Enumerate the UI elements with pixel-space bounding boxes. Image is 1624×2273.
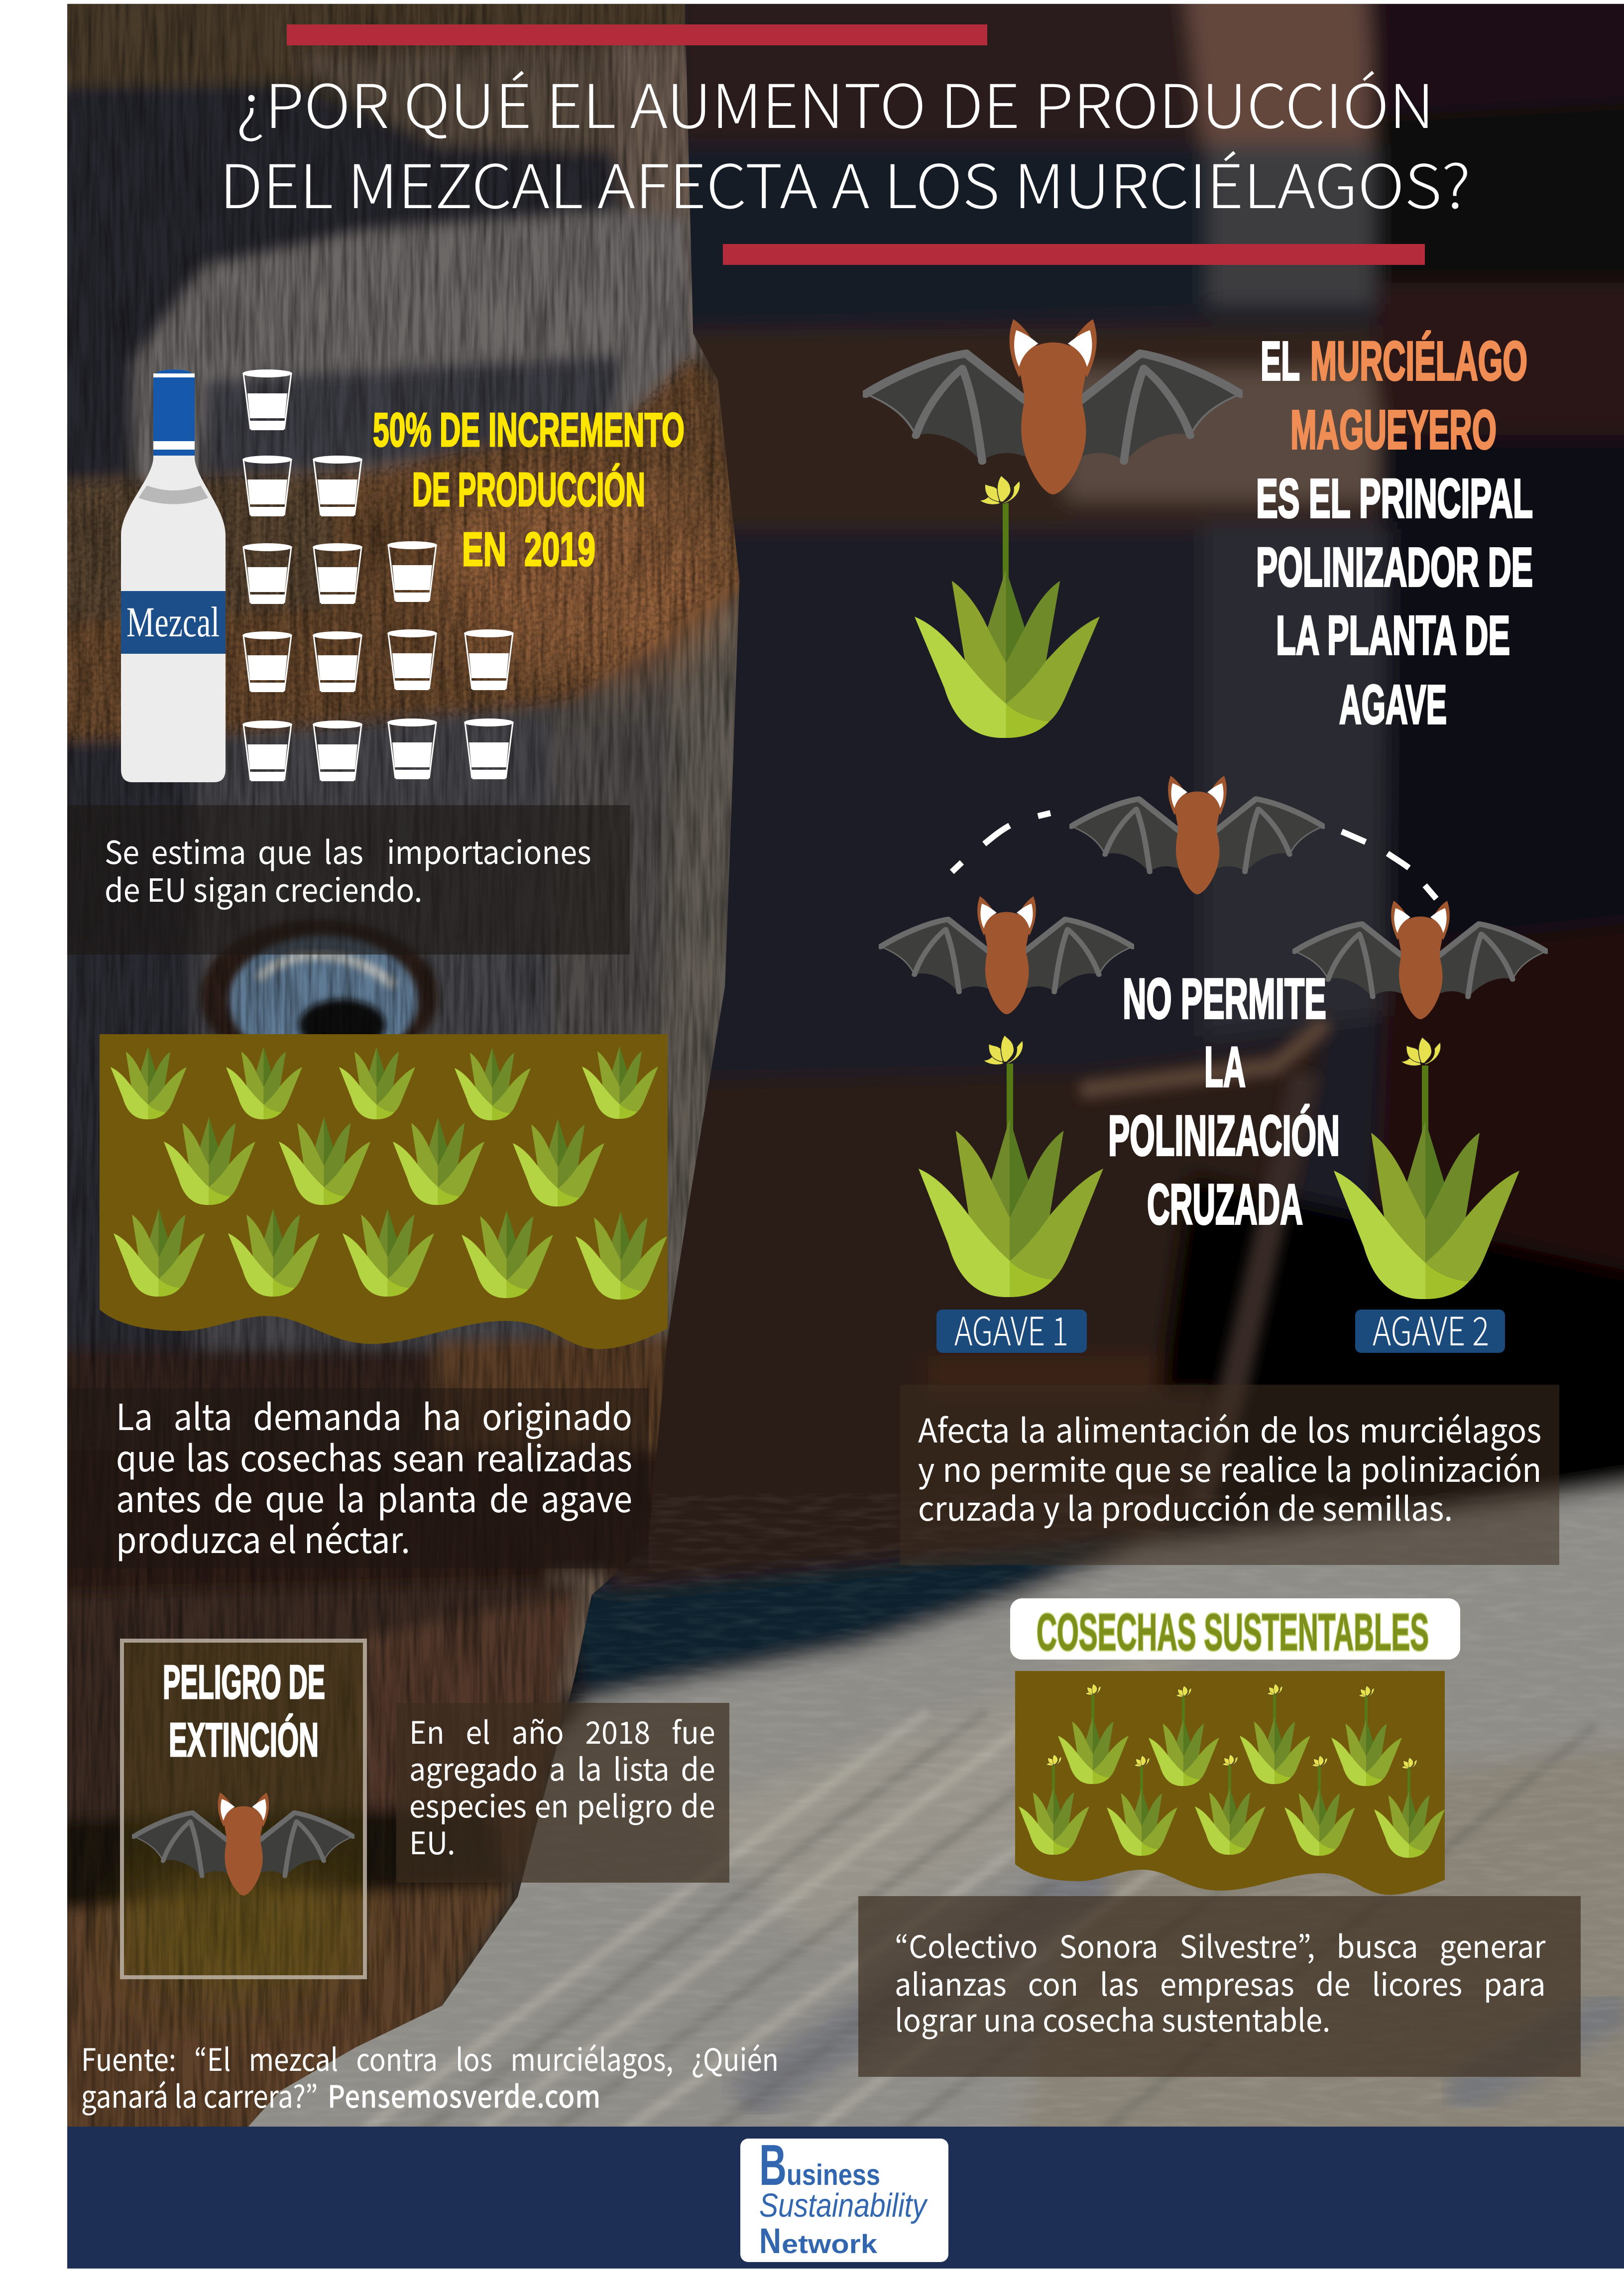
heading: production increase: 50% DE INCREMENTO [373,403,685,457]
icon: agave 1 with flower [919,1035,1103,1297]
icon: mezcal bottle: Mezcal [126,598,220,646]
logo: Business Sustainability Network: B [759,2133,787,2197]
panel: imports estimate [67,805,630,955]
panel: sustainable field with flowering agaves [1015,1671,1445,1895]
panel: feeding impact text: y no permite que se realice la polinización [918,1444,1541,1492]
icon: bat over agave 2 [1294,901,1546,1019]
heading: production increase [373,403,685,576]
panel: extinction danger box [122,1641,365,1977]
heading: cross pollination: POLINIZACIÓN [1108,1104,1340,1168]
heading: cross pollination: LA [1204,1036,1246,1099]
left barrel [29,0,783,2161]
panel: high demand text: antes de que la planta de agave [116,1470,632,1523]
heading: sustainable harvests [1010,1598,1460,1662]
heading: production increase: EN 2019 [462,523,595,576]
panel: extinction danger box: PELIGRO DE [163,1656,325,1709]
title [220,58,1471,226]
footer band [67,2127,1624,2269]
panel: imports estimate: Se estima que las importaciones [105,828,591,873]
heading: maguey bat [1256,331,1533,735]
panel: feeding impact text: cruzada y la producción de semillas. [918,1483,1453,1531]
icon: mezcal bottle [121,369,226,782]
panel: Colectivo Sonora Silvestre text [858,1896,1581,2077]
panel: endangered species text: En el año 2018 fue [409,1708,715,1753]
panel: extinction danger box: EXTINCIÓN [169,1713,319,1767]
heading: production increase: DE PRODUCCIÓN [412,463,645,516]
logo: Business Sustainability Network: N [759,2222,781,2261]
heading: maguey bat: AGAVE [1339,674,1447,735]
title: ¿POR QUÉ EL AUMENTO DE PRODUCCIÓN [236,58,1434,145]
top red bar [287,24,987,45]
panel: Colectivo Sonora Silvestre text: lograr una cosecha sustentable. [895,1996,1330,2040]
logo: Business Sustainability Network: usiness [787,2158,880,2191]
panel: high demand text [67,1388,649,1568]
panel: Colectivo Sonora Silvestre text: “Colectivo Sonora Silvestre”, busca generar [895,1922,1546,1967]
panel: imports estimate: de EU sigan creciendo. [105,865,422,911]
panel: feeding impact text [900,1385,1559,1565]
logo: Business Sustainability Network: Sustainability [759,2187,928,2224]
icon: large bat with agave [866,319,1241,738]
source citation [81,2035,779,2117]
panel: agave field [100,1034,668,1349]
logo: Business Sustainability Network: etwork [782,2230,878,2259]
heading: cross pollination: CRUZADA [1147,1173,1303,1236]
panel: endangered species text [396,1703,729,1883]
panel: endangered species text: agregado a la lista de [409,1745,715,1790]
panel: high demand text: produzca el néctar. [116,1511,410,1563]
heading: maguey bat: EL [1261,331,1300,392]
panel: endangered species text: EU. [409,1818,455,1863]
arrow: dashed flight path [952,813,1436,899]
heading: cross pollination: NO PERMITE [1123,967,1326,1031]
bottom red bar [723,244,1425,265]
logo: Business Sustainability Network [740,2133,948,2262]
panel: feeding impact text: Afecta la alimentación de los murciélagos [918,1405,1541,1452]
label: agave 2: AGAVE 2 [1373,1300,1489,1357]
icon: bat over agave 1 [881,896,1133,1014]
panel: Colectivo Sonora Silvestre text: alianzas con las empresas de licores para [895,1960,1546,2005]
panel: high demand text: que las cosechas sean realizadas [116,1430,632,1482]
icon: flying bat centre [1071,776,1323,894]
panel: endangered species text: especies en peligro de [409,1782,715,1826]
heading: cross pollination [1108,967,1340,1236]
source citation: Fuente: “El mezcal contra los murciélagos, ¿Quién [81,2035,779,2080]
label: agave 1: AGAVE 1 [954,1300,1068,1357]
source citation: ganará la carrera?” Pensemosverde.com [81,2072,601,2117]
icon: agave 2 with flower [1334,1037,1519,1299]
panel: high demand text: La alta demanda ha originado [116,1388,632,1440]
icon: glasses pictogram [242,369,514,781]
title: DEL MEZCAL AFECTA A LOS MURCIÉLAGOS? [220,138,1471,226]
